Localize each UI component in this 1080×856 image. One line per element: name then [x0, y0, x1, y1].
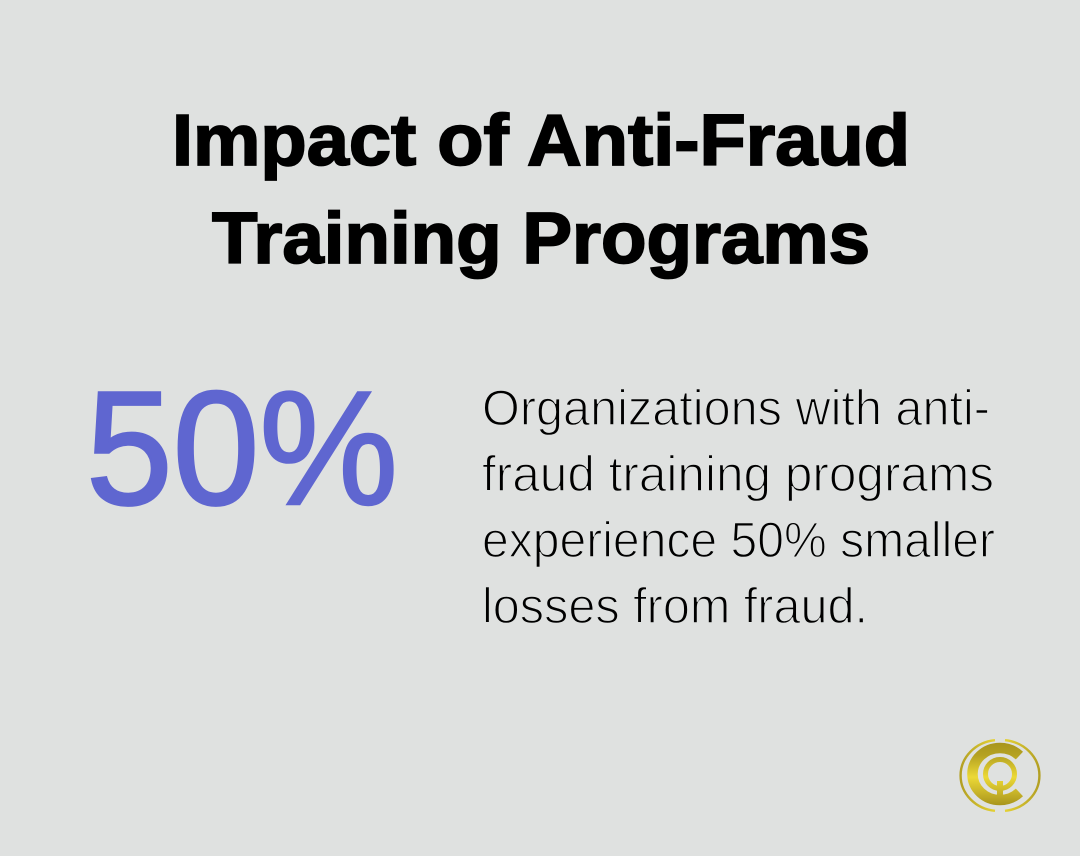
- description text: fraud training programs: [482, 446, 994, 502]
- description text: [482, 380, 995, 634]
- description text: Organizations with anti-: [482, 380, 990, 436]
- big statistic: 50%: 50%: [86, 358, 398, 539]
- title: Training Programs: [212, 199, 870, 279]
- icon: gold CQ logo: [961, 740, 1039, 811]
- description text: losses from fraud.: [482, 578, 868, 634]
- title: Impact of Anti-Fraud: [172, 101, 910, 181]
- description text: experience 50% smaller: [482, 512, 995, 568]
- title: [172, 101, 910, 279]
